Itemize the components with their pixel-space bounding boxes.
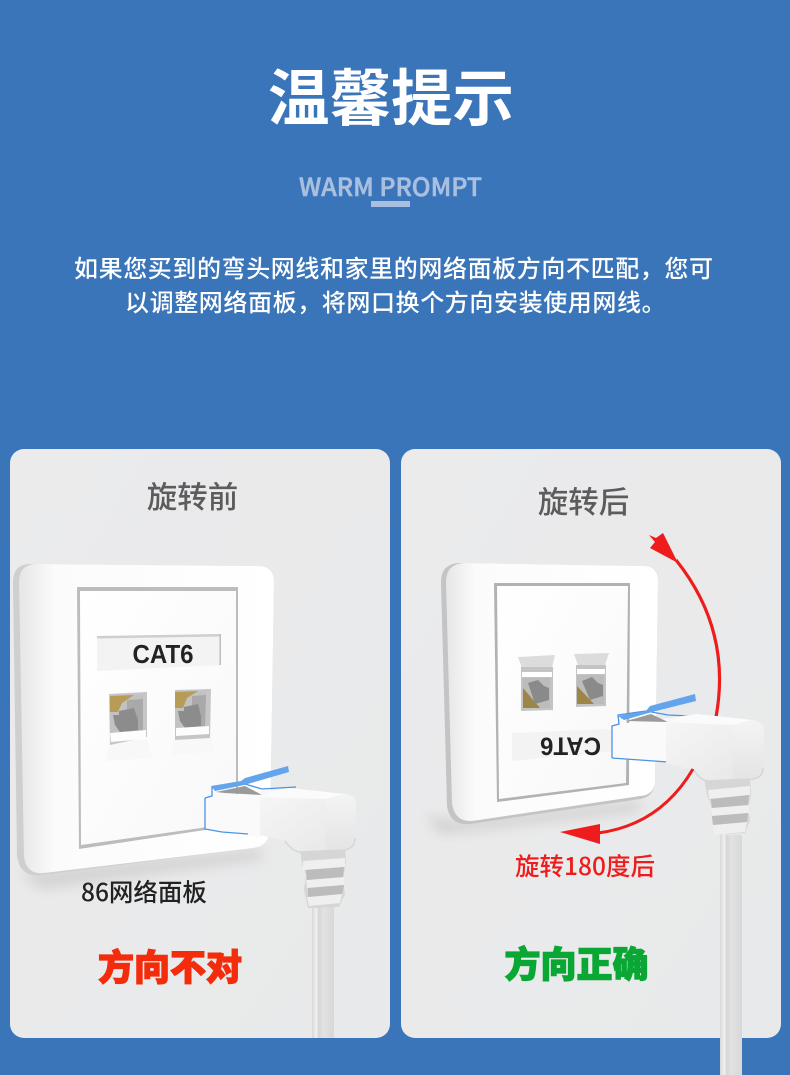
status: wrong direction: 方向不对 — [98, 939, 242, 991]
description text: 以调整网络面板，将网口换个方向安装使用网线。 — [125, 283, 666, 318]
title: 温馨提示 — [268, 49, 514, 138]
description text: 如果您买到的弯头网线和家里的网络面板方向不匹配，您可 — [74, 249, 714, 284]
icon: right socket — [171, 689, 214, 755]
icon: wall plate with CAT6 label: CAT6 — [132, 639, 194, 669]
arrow: lower red rotation arc — [560, 769, 693, 844]
icon: rotated right socket — [574, 653, 609, 707]
heading: before rotation: 旋转前 — [147, 473, 238, 517]
arrow: upper red rotation arc — [649, 533, 720, 717]
description text — [74, 249, 714, 318]
label: after rotating 180 degrees: 旋转180度后 — [515, 848, 655, 883]
panel: after rotation — [401, 449, 781, 1075]
icon: left socket — [105, 692, 152, 761]
status: correct direction: 方向正确 — [504, 936, 649, 988]
icon: angled plug and flat cable — [205, 766, 356, 1038]
icon: wall plate rotated: CAT6 — [540, 732, 601, 760]
icon: wall plate rotated — [425, 563, 658, 835]
panel: before rotation — [10, 449, 390, 1038]
label: 86 network panel: 86网络面板 — [81, 874, 207, 909]
subtitle: WARM PROMPT: WARM PROMPT — [299, 168, 482, 204]
icon: rotated left socket — [518, 655, 555, 711]
heading: after rotation: 旋转后 — [538, 478, 629, 522]
icon: wall plate with CAT6 label — [13, 564, 274, 890]
icon: angled plug and long cable — [612, 694, 764, 1075]
